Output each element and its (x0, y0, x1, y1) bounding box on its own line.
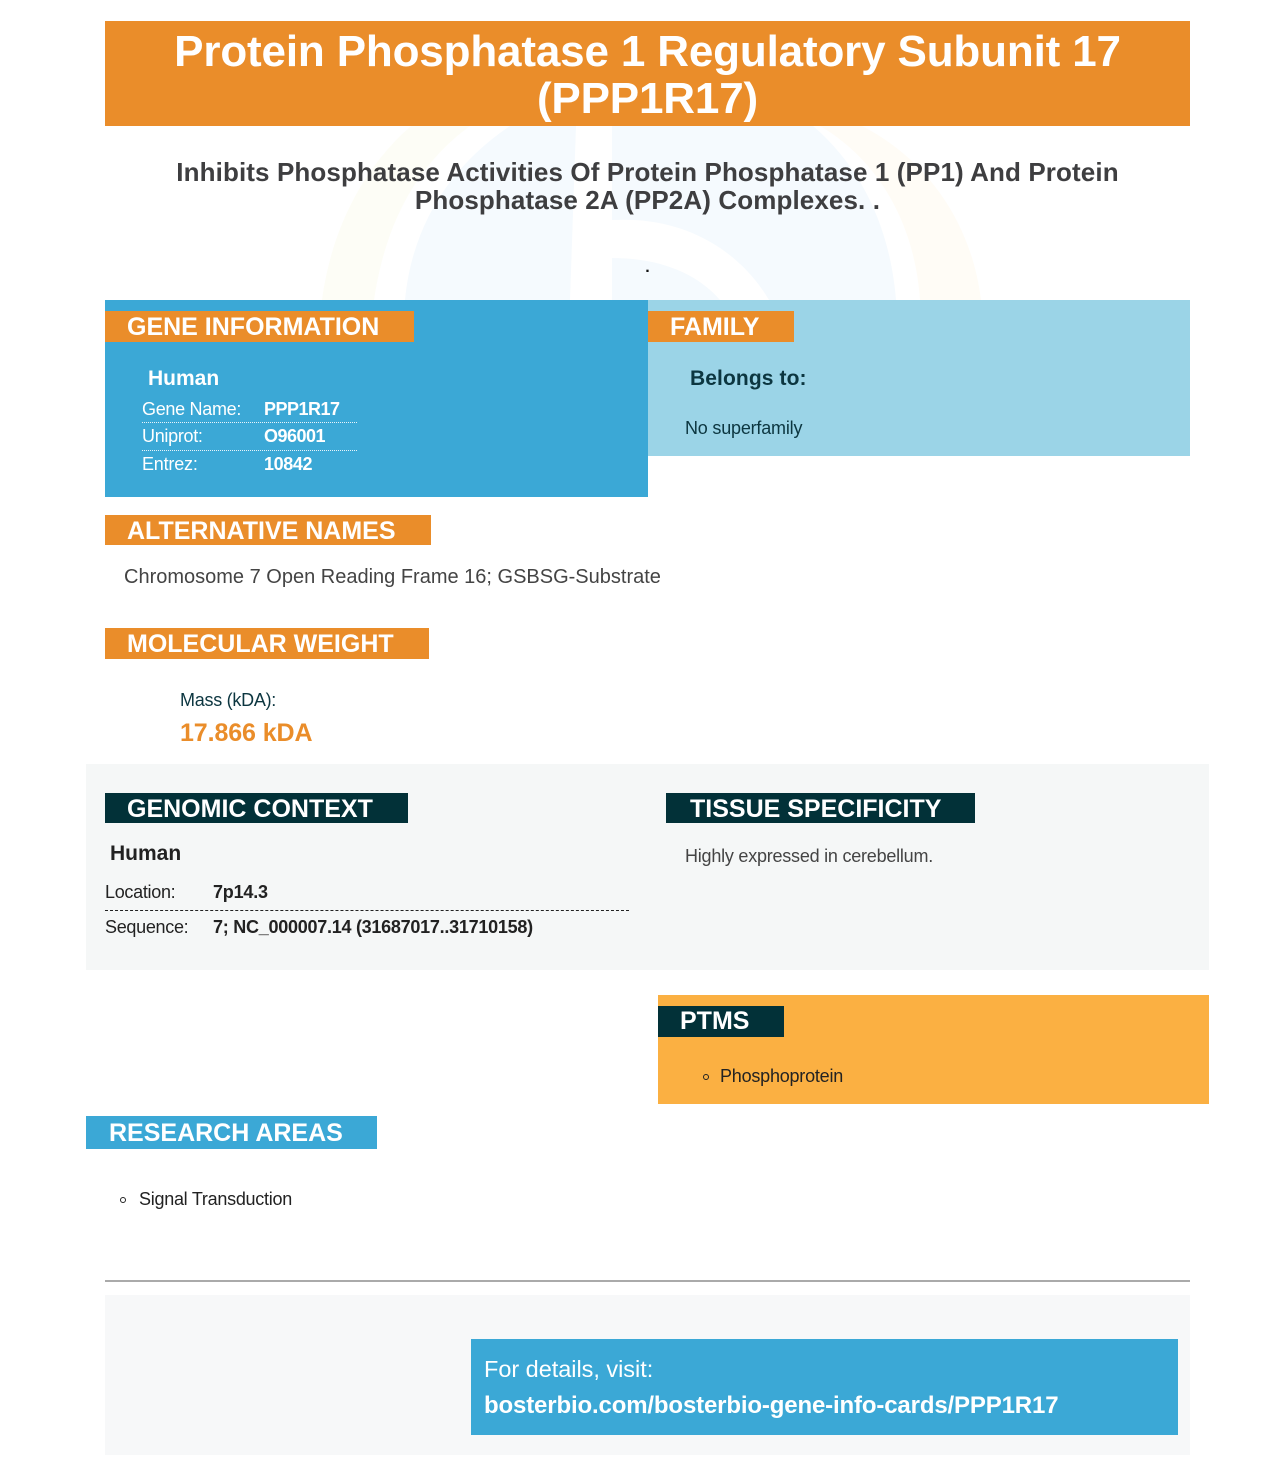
location row (105, 879, 629, 911)
family text: No superfamily (685, 418, 802, 438)
uniprot row (142, 423, 357, 451)
heading: ptms (658, 1006, 784, 1037)
heading: alternative names: ALTERNATIVE NAMES (127, 517, 396, 545)
location row: Location: (105, 882, 175, 902)
visit url: bosterbio.com/bosterbio-gene-info-cards/PPP1R17 (484, 1392, 1058, 1419)
title banner (105, 21, 1190, 126)
heading: tissue specificity: TISSUE SPECIFICITY (690, 795, 941, 823)
title banner: (PPP1R17) (537, 74, 758, 123)
gene name row: Gene Name: (142, 399, 241, 419)
gene name row (142, 396, 357, 423)
ptm item: Phosphoprotein (720, 1066, 843, 1086)
research area item: Signal Transduction (139, 1189, 292, 1209)
entrez row (142, 454, 312, 474)
heading: ptms: PTMS (680, 1007, 749, 1035)
subtitle: Inhibits Phosphatase Activities Of Protein Phosphatase 1 (PP1) And Protein (176, 157, 1119, 187)
heading: research areas: RESEARCH AREAS (109, 1119, 343, 1147)
heading: family (648, 311, 794, 342)
heading: gene information: GENE INFORMATION (127, 313, 379, 341)
dot note: . (645, 259, 650, 276)
tissue text: Highly expressed in cerebellum. (685, 846, 933, 866)
location row: 7p14.3 (213, 882, 268, 902)
sequence row: Sequence: (105, 917, 188, 937)
subtitle (176, 157, 1119, 215)
sequence row: 7; NC_000007.14 (31687017..31710158) (213, 917, 533, 937)
heading: molecular weight: MOLECULAR WEIGHT (127, 630, 394, 658)
research area bullet marker (120, 1197, 126, 1203)
footer divider (105, 1280, 1190, 1282)
call to action box (471, 1339, 1178, 1435)
gene name row: PPP1R17 (264, 399, 340, 419)
panel: footer (105, 1295, 1190, 1455)
mass value: 17.866 kDA (180, 719, 312, 747)
panel: gene information (105, 300, 648, 497)
mass label: Mass (kDA): (180, 690, 276, 710)
heading: family: FAMILY (670, 313, 759, 341)
subtitle: Phosphatase 2A (PP2A) Complexes. . (415, 185, 880, 215)
panel: genomic context and tissue specificity (86, 764, 1209, 970)
entrez row: Entrez: (142, 454, 198, 474)
visit label: For details, visit: (484, 1356, 653, 1382)
uniprot row: Uniprot: (142, 426, 203, 446)
heading: genomic context: GENOMIC CONTEXT (127, 795, 373, 823)
panel: ptms (658, 995, 1209, 1104)
heading: research areas (86, 1116, 377, 1149)
species label: Human (148, 367, 219, 390)
title banner: Protein Phosphatase 1 Regulatory Subunit 17 (174, 27, 1121, 76)
uniprot row: O96001 (264, 426, 325, 446)
species label: Human (110, 842, 181, 865)
bullet marker (703, 1074, 709, 1080)
background watermark logo (322, 126, 981, 300)
panel: family (648, 300, 1190, 456)
belongs to label: Belongs to: (690, 367, 807, 390)
entrez row: 10842 (264, 454, 312, 474)
alternative names text: Chromosome 7 Open Reading Frame 16; GSBSG-Substrate (124, 566, 661, 588)
